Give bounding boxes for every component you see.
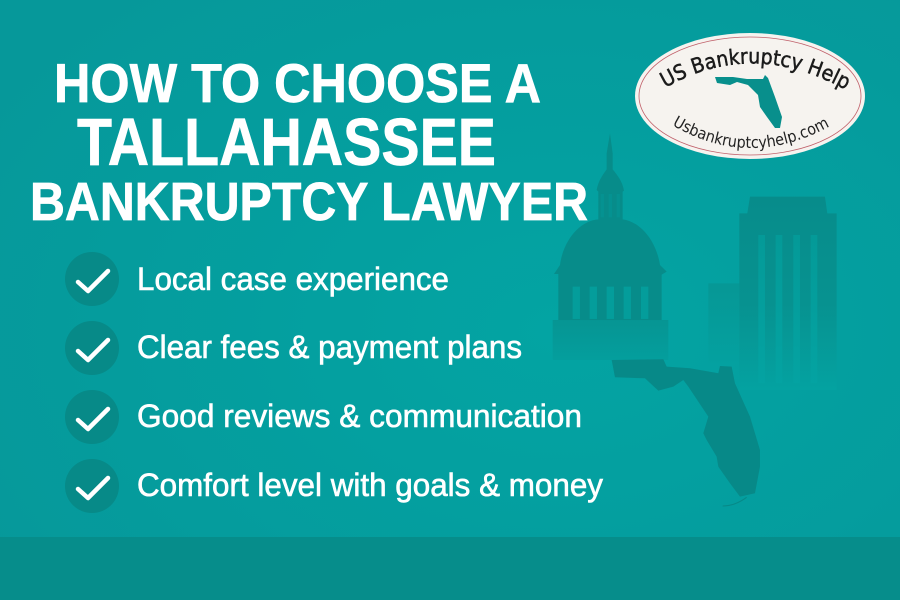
item: local case experience — [65, 252, 449, 306]
item: clear fees — [65, 321, 522, 375]
logo arc heading: US Bankruptcy Help — [659, 48, 849, 90]
icon: Florida silhouette — [612, 359, 760, 506]
item: good reviews — [65, 390, 582, 444]
logo arc website: Usbankruptcyhelp.com — [674, 116, 829, 152]
title line 3: BANKRUPTCY LAWYER — [30, 172, 588, 232]
footer band — [0, 537, 900, 600]
checklist — [65, 252, 603, 513]
item: good reviews: Good reviews & communication — [137, 398, 582, 434]
title — [30, 52, 588, 232]
icon: capitol dome — [553, 133, 668, 360]
icon: logo Florida — [715, 75, 782, 128]
item: clear fees: Clear fees & payment plans — [137, 329, 522, 365]
item: comfort level — [65, 459, 603, 513]
item: comfort level: Comfort level with goals & money — [137, 467, 603, 503]
skyline: capitol and office tower — [553, 133, 837, 506]
item: local case experience: Local case experience — [137, 261, 449, 297]
icon: office tower — [708, 197, 837, 390]
title line 1: HOW TO CHOOSE A — [54, 52, 541, 114]
logo badge — [635, 33, 865, 159]
title line 2: TALLAHASSEE — [77, 105, 496, 180]
